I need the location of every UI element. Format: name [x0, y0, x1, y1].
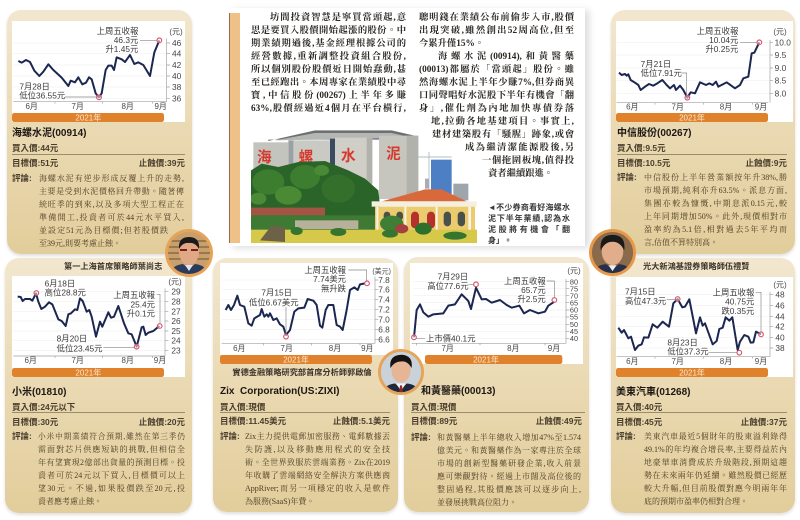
chart: 中信股份 price line: 6月	[626, 103, 639, 112]
article column 2: 身」,催化劑為內地加快專債券落	[419, 104, 574, 114]
chart: 中信股份 price line: 低位7.91元	[641, 68, 682, 78]
chart: 海螺水泥 price line: 46	[172, 38, 182, 48]
comment text: 年收購了雲端網絡安全解決方案供應商	[245, 471, 390, 480]
comment text: AppRiver;而另一項穩定的收入是軟件	[245, 484, 390, 493]
chart: 美東汽車 price line: 7月	[671, 357, 684, 366]
chart: 小米 price line: 29	[171, 286, 181, 296]
chart: 小米 price line: 升0.1元	[127, 308, 155, 318]
buy price: 買入價:9.5元	[617, 143, 666, 153]
photo caption: 泥下半年業績,認為水	[488, 214, 570, 223]
comment text: 資者應考慮止蝕。	[38, 497, 102, 506]
chart: 美東汽車 price line: 低位37.3元	[667, 347, 709, 357]
chart: 小米 price line: 24	[171, 336, 181, 346]
article column 1: 63%,股價經過近4個月在平台橫行,	[251, 104, 406, 114]
icon: analyst portrait, 伍禮賢	[589, 229, 636, 276]
target price: 目標價:11.45美元	[220, 416, 286, 426]
chart: 中信股份 price line: 8.5	[775, 76, 787, 86]
comment text: 較大升幅,但目前股價對應今明兩年年	[644, 484, 787, 493]
chart: 小米 price line: 27	[171, 306, 181, 316]
chart: 海螺水泥 price line: 46.3元	[114, 35, 138, 45]
comment text: Zix主力提供電郵加密服務、電郵數據丟	[245, 432, 390, 441]
chart: 小米 price line: 25.4元	[130, 299, 155, 309]
chart: Zix price line: 7月15日	[261, 287, 292, 297]
panel: 和黃醫藥 stock pick	[404, 257, 589, 512]
article column 2: 然海螺水泥上半年少賺7%,但券商異	[419, 78, 574, 88]
photo caption: 泥股將有機會「翻	[488, 225, 570, 234]
chart: 和黃醫藥 price line: 40	[570, 334, 578, 343]
chart: 和黃醫藥 price line: 60	[570, 306, 578, 315]
comment text: 市場的創新型醫藥研發企業,收入前景	[437, 458, 581, 468]
chart: 小米 price line: 9月	[154, 356, 166, 365]
chart: 小米 price line: 低位23.45元	[57, 343, 102, 353]
sign lettering: 螺	[299, 149, 314, 166]
article column 2: 成為繼清潔能源股後,另	[465, 142, 574, 152]
garden and lawn	[251, 216, 477, 243]
stock title: 小米(01810)	[12, 387, 66, 398]
article column 2: 一個拖圍板塊,值得投	[482, 156, 574, 166]
stop loss: 止蝕價:49元	[536, 416, 582, 426]
analyst name: 光大新鴻基證券策略師伍禮賢	[643, 262, 749, 271]
chart: 美東汽車 price line: 9月	[755, 357, 767, 366]
chart: 中信股份 price line	[616, 21, 793, 122]
chart: 小米 price line: 23	[171, 346, 181, 356]
chart: 和黃醫藥 price line: 上市價40.1元	[426, 333, 476, 343]
icon: analyst portrait, 葉尚志	[165, 229, 213, 277]
chart: 海螺水泥 price line: 低位36.55元	[19, 91, 65, 101]
chart: 小米 price line: 高位28.8元	[45, 288, 86, 298]
comment text: 地豪華車消費成於升級階段,預期這趨	[644, 458, 787, 467]
chart: 中信股份 price line: 10.04元	[709, 35, 738, 45]
chart: Zix price line: 7.74美元	[313, 274, 346, 284]
chart: 海螺水泥 price line: 38	[172, 82, 182, 92]
chart: 小米 price line: 8月20日	[57, 333, 87, 343]
chart: Zix price line: 7.0	[378, 314, 390, 324]
chart: 和黃醫藥 price line	[410, 263, 583, 364]
chart: Zix price line: 7月	[280, 344, 293, 353]
comment text: 整固過程,其股價應該可以逐步向上,	[437, 484, 581, 494]
article column 1: 寶,中信股份(00267)上半年多賺	[251, 90, 406, 100]
chart: 美東汽車 price line: 40	[775, 332, 785, 342]
article column 1: 至已經跑出。本周專家在業績股中尋	[251, 78, 406, 88]
chart: 小米 price line: 25	[171, 326, 181, 336]
chart: 和黃醫藥 price line: 65	[570, 298, 578, 307]
stock title: 海螺水泥(00914)	[12, 128, 86, 139]
comment text: 海螺水泥有逆步形成反覆上升的走勢,	[39, 174, 184, 183]
target price: 目標價:30元	[12, 417, 58, 427]
sign lettering	[257, 146, 401, 166]
comment text: 並發展挑戰高位阻力。	[437, 498, 517, 506]
chart: 美東汽車 price line: 38	[775, 343, 785, 353]
chart: Zix price line: 6月	[233, 344, 246, 353]
chart: 海螺水泥 price line: 7月28日	[19, 82, 50, 92]
stock title: 中信股份(00267)	[617, 128, 691, 139]
stock title: 和黃醫藥(00013)	[421, 386, 495, 397]
comment text: 需面對芯片供應短缺的挑戰,但相信全	[38, 445, 185, 454]
chart: 海螺水泥 price line: 7月	[71, 102, 84, 111]
article column 2: 建材建築股有「騷腥」跡象,或會	[432, 130, 574, 140]
comment text: 上年同期增加50%。此外,現價相對市	[644, 212, 787, 221]
chart: Zix price line: 6.8	[378, 324, 390, 334]
chart: Zix price line: 8月	[329, 344, 341, 353]
article column 2: 口同聲唱好水泥股下半年有機會「翻	[419, 90, 574, 100]
comment text: 年有望實現2億部出貨量的預測目標。投	[38, 458, 185, 467]
stock title: 美東汽車(01268)	[616, 387, 690, 398]
comment label: 評論:	[411, 432, 431, 442]
comment text: 失防護,以及移動應用程式的安全技	[245, 445, 390, 454]
chart: 美東汽車 price line: 46	[775, 300, 785, 310]
chart: 和黃醫藥 price line: 高位77.6元	[427, 281, 469, 291]
sign lettering: 水	[341, 147, 356, 164]
comment text	[39, 174, 184, 248]
comment text: 望30元。不過,如果股價跌至20元,投	[38, 484, 185, 493]
chart: 小米 price line: 28	[171, 296, 181, 306]
photo caption: ◄不少券商看好海螺水	[488, 203, 570, 212]
target price: 目標價:51元	[12, 158, 58, 168]
chart: 和黃醫藥 price line: 80	[570, 277, 578, 286]
comment text: 美東汽車最近5個財年的股東溢利錄得	[644, 432, 787, 441]
chart: 美東汽車 price line: 跌0.35元	[721, 306, 754, 316]
chart: Zix price line: 6.6	[378, 334, 390, 344]
chart: 美東汽車 price line: 高位47.3元	[625, 296, 666, 306]
chart: 美東汽車 price line: 7月15日	[625, 287, 656, 297]
house	[372, 189, 477, 231]
chart: 中信股份 price line: 10.0	[775, 37, 791, 47]
chart: 中信股份 price line: 7月21日	[641, 59, 671, 69]
chart: 和黃醫藥 price line: 8月	[507, 344, 520, 353]
chart: 和黃醫藥 price line: 上周五收報	[504, 276, 546, 286]
comment text: 中信股份上半年營業額按年升38%,勝	[644, 173, 787, 182]
chart: 美東汽車 price line	[616, 277, 793, 377]
panel: 中信股份 stock pick	[611, 10, 795, 254]
stop loss: 止蝕價:37元	[741, 417, 787, 427]
chart: 中信股份 price line: 上周五收報	[697, 26, 739, 36]
comment label: 評論:	[220, 431, 240, 441]
article column 2: 出現突破,雖然創出52周高位,但至	[419, 26, 574, 36]
chart: 海螺水泥 price line: 36	[172, 93, 182, 103]
comment text: 術。全世界致服於雲端業務。Zix在2019	[245, 458, 390, 467]
chart: 中信股份 price line: 升0.25元	[705, 44, 738, 54]
chart: Zix price line: 無升跌	[321, 283, 347, 293]
target price: 目標價:10.5元	[617, 158, 670, 168]
comment text	[644, 173, 787, 247]
comment text	[644, 432, 787, 506]
photo caption: 身」。	[488, 236, 512, 245]
trees	[250, 161, 382, 231]
chart: 小米 price line: 6月	[24, 356, 37, 365]
comment text: 為服務(SaaS)年費。	[245, 497, 314, 506]
chart: 海螺水泥 price line: 44	[172, 49, 182, 59]
chart: 中信股份 price line: 8月	[720, 103, 732, 112]
comment text: 準備開工,投資者可於44元水平買入,	[39, 213, 184, 222]
article column 1: 經營數據,重新調整投資組合股份,	[251, 52, 406, 62]
comment text: 小米中期業績符合預期,雖然在第三季仍	[38, 432, 185, 441]
chart: 中信股份 price line: 7月	[671, 103, 684, 112]
chart: 海螺水泥 price line: 40	[172, 71, 182, 81]
buy price: 買入價:40元	[616, 402, 662, 412]
article column 1: 所以個別股份股價近日開始蠢動,甚	[251, 64, 406, 74]
chart: 和黃醫藥 price line: 7月	[441, 344, 454, 353]
article column 2: 地,拉動各地基建項目。事實上,	[431, 116, 574, 126]
comment text: 資者可於24元以下買入,目標價可以上	[38, 471, 185, 480]
stop loss: 止蝕價:9元	[745, 158, 787, 168]
comment label: 評論:	[617, 172, 637, 182]
panel: 海螺水泥 stock pick	[7, 10, 192, 254]
sign lettering: 泥	[386, 146, 401, 163]
silos	[253, 130, 418, 199]
comment text: 至39元,則要考慮止蝕。	[39, 239, 121, 248]
chart: 美東汽車 price line: 42	[775, 322, 785, 332]
chart: 小米 price line: 8月	[121, 356, 134, 365]
chart: 美東汽車 price line: 6月	[626, 357, 639, 366]
sign lettering: 海	[257, 148, 272, 166]
buy price: 買入價:現價	[411, 402, 456, 412]
comment label: 評論:	[12, 431, 32, 441]
chart: 和黃醫藥 price line: 75	[570, 284, 578, 293]
target price: 目標價:45元	[616, 417, 662, 427]
article column 2: 海螺水泥(00914),和黃醫藥	[438, 52, 574, 62]
article column 2: (00013)都屬於「當頭起」股份。雖	[419, 64, 574, 74]
chart: 和黃醫藥 price line: 9月	[548, 344, 560, 353]
chart: Zix price line: 7.8	[378, 275, 390, 285]
comment text: 盈率約為5.1倍,相對過去5年平均而	[644, 225, 787, 234]
chart: Zix price line: (美元)	[372, 266, 391, 275]
chart: 美東汽車 price line: 44	[775, 311, 785, 321]
analyst name: 實德金融策略研究部首席分析師郭啟倫	[232, 368, 372, 377]
analyst name: 第一上海首席策略師葉尚志	[64, 262, 162, 271]
comment text: 統旺季的到來,以及多項大型工程正在	[39, 200, 184, 209]
stop loss: 止蝕價:39元	[139, 158, 185, 168]
chart: 和黃醫藥 price line: 65.7元	[521, 285, 546, 295]
comment label: 評論:	[616, 431, 636, 441]
chart: 小米 price line: 6月18日	[45, 278, 75, 288]
panel: 美東汽車 stock pick	[611, 258, 795, 513]
article column 1: 坊間投資智慧是寧買當頭起,意	[270, 12, 406, 22]
chart: 小米 price line: 26	[171, 316, 181, 326]
chart: 小米 price line: 上周五收報	[113, 290, 156, 300]
chart: 和黃醫藥 price line: 45	[570, 327, 578, 336]
chart: Zix price line	[220, 263, 393, 364]
buy price: 買入價:44元	[12, 143, 58, 153]
chart: 美東汽車 price line: 8月	[720, 357, 732, 366]
buy price: 買入價:24元以下	[12, 402, 75, 412]
photo: cement plant	[251, 130, 477, 243]
article column 2: 資者繼續跟進。	[488, 168, 553, 178]
comment text: 49.1%的年均複合增長率,主要得益於內	[644, 445, 787, 454]
comment text: 言,估值不算特別高。	[644, 238, 718, 247]
chart: 美東汽車 price line: 上周五收報	[713, 287, 755, 297]
comment text: 勢在未來兩年仍延續。雖然股價已經歷	[644, 471, 787, 480]
chart: Zix price line: 7.4	[378, 295, 390, 305]
chart: 和黃醫藥 price line: 50	[570, 320, 578, 329]
chart: Zix price line: 7.2	[378, 304, 390, 314]
panel: centre article	[229, 8, 585, 246]
chart: Zix price line: 上周五收報	[304, 265, 347, 275]
chart: 海螺水泥 price line	[12, 21, 185, 122]
chart: 中信股份 price line: (元)	[773, 27, 787, 36]
chart: 海螺水泥 price line: 6月	[25, 102, 38, 111]
chart: Zix price line: 7.6	[378, 285, 390, 295]
comment text: 和黃醫藥上半年總收入增加47%至1.574	[437, 432, 581, 442]
chart: 海螺水泥 price line: (元)	[169, 28, 183, 37]
article column 1: 期業績期過後,基金經理根據公司的	[251, 38, 406, 48]
chart: 海螺水泥 price line: 8月	[121, 102, 134, 111]
comment text	[437, 432, 581, 506]
comment text: 億美元。和黃醫藥作為一家專注於全球	[437, 446, 581, 454]
orange side strip	[229, 13, 240, 243]
chart: 海螺水泥 price line: 42	[172, 60, 182, 70]
panel: 小米 stock pick	[5, 258, 192, 513]
chart: Zix price line: 9月	[361, 344, 374, 353]
chart: 和黃醫藥 price line: 7月29日	[438, 272, 468, 282]
comment text: 應可樂觀對待。經過上市闊及高位後的	[437, 472, 581, 480]
chart: 和黃醫藥 price line: 55	[570, 313, 578, 322]
comment text: 主要是受到水泥價格回升帶動。隨著傳	[39, 187, 184, 196]
chart: 小米 price line	[12, 276, 185, 377]
blue tower	[418, 152, 468, 200]
chart: 中信股份 price line: 9.0	[775, 63, 787, 73]
article column 1	[251, 12, 406, 114]
comment label: 評論:	[12, 173, 32, 183]
chart: 和黃醫藥 price line: 升2.5元	[517, 294, 546, 304]
chart: 中信股份 price line: 8.0	[775, 88, 787, 98]
chart: 美東汽車 price line: 8月23日	[667, 338, 698, 348]
article column 2: 聰明錢在業績公布前偷步入市,股價	[419, 12, 574, 22]
chart: 海螺水泥 price line: 升1.45元	[105, 44, 138, 54]
photo caption	[488, 203, 570, 245]
comment text	[38, 432, 185, 506]
comment text: 市場預期,純利亦升63.5%。派息方面,	[644, 186, 787, 195]
comment text: 集團亦較為慷慨,中期息派0.15元,較	[644, 199, 787, 208]
comment text: 並設定51元為目標價;但若股價跌	[39, 226, 168, 235]
chart: 美東汽車 price line: 48	[775, 290, 785, 300]
chart: 美東汽車 price line: 40.75元	[725, 297, 754, 307]
stock title: Zix Corporation(US:ZIXI)	[220, 386, 339, 397]
chart: 中信股份 price line: 9月	[755, 103, 767, 112]
target price: 目標價:89元	[411, 416, 457, 426]
chart: 海螺水泥 price line: 9月	[154, 102, 167, 111]
chart: 中信股份 price line: 9.5	[775, 50, 787, 60]
article column 1: 思是要買入股價開始起漲的股份。中	[251, 26, 406, 36]
panel: Zix Corporation stock pick	[213, 258, 398, 512]
chart: Zix price line: 低位6.67美元	[249, 297, 299, 307]
chart: 小米 price line: 7月	[71, 356, 84, 365]
stop loss: 止蝕價:20元	[139, 417, 185, 427]
chart: 海螺水泥 price line: 上周五收報	[97, 26, 139, 36]
article column 2: 今累升僅15%。	[419, 38, 484, 48]
article column 2	[419, 12, 574, 178]
icon: analyst portrait, 郭啟倫	[378, 349, 424, 395]
chart: 美東汽車 price line: (元)	[773, 281, 787, 290]
chart: 小米 price line: (元)	[168, 277, 182, 286]
comment text	[245, 432, 390, 506]
chart: 和黃醫藥 price line: 70	[570, 291, 578, 300]
chart: 和黃醫藥 price line: (元)	[567, 266, 581, 275]
buy price: 買入價:現價	[220, 402, 265, 412]
stop loss: 止蝕價:5.1美元	[333, 416, 390, 426]
comment text: 底的預期市盈率仍相對合理。	[644, 497, 748, 506]
